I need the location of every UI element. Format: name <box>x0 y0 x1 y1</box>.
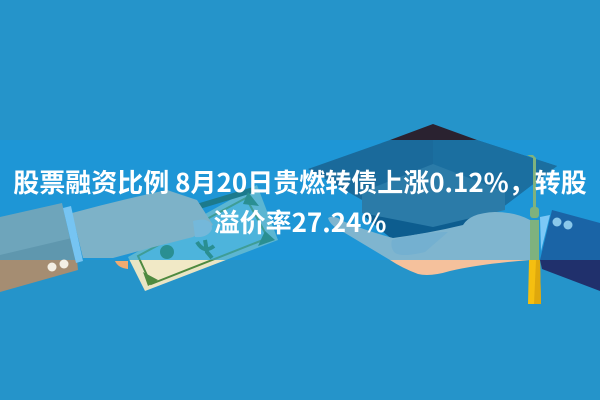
translucent band <box>0 140 600 260</box>
illustration: hands, money and graduation cap <box>0 124 600 304</box>
title: 股票融资比例 8月20日贵燃转债上涨0.12%，转股 <box>13 163 587 200</box>
icon: right open hand <box>328 212 530 275</box>
icon: tassel <box>527 155 541 304</box>
icon: graduation cap <box>308 124 557 240</box>
title: 溢价率27.24% <box>214 203 386 240</box>
icon: banknotes <box>128 185 278 291</box>
icon: left hand <box>72 190 213 269</box>
icon: left sleeve <box>0 203 83 292</box>
title <box>13 163 587 240</box>
icon: right sleeve <box>540 210 600 291</box>
